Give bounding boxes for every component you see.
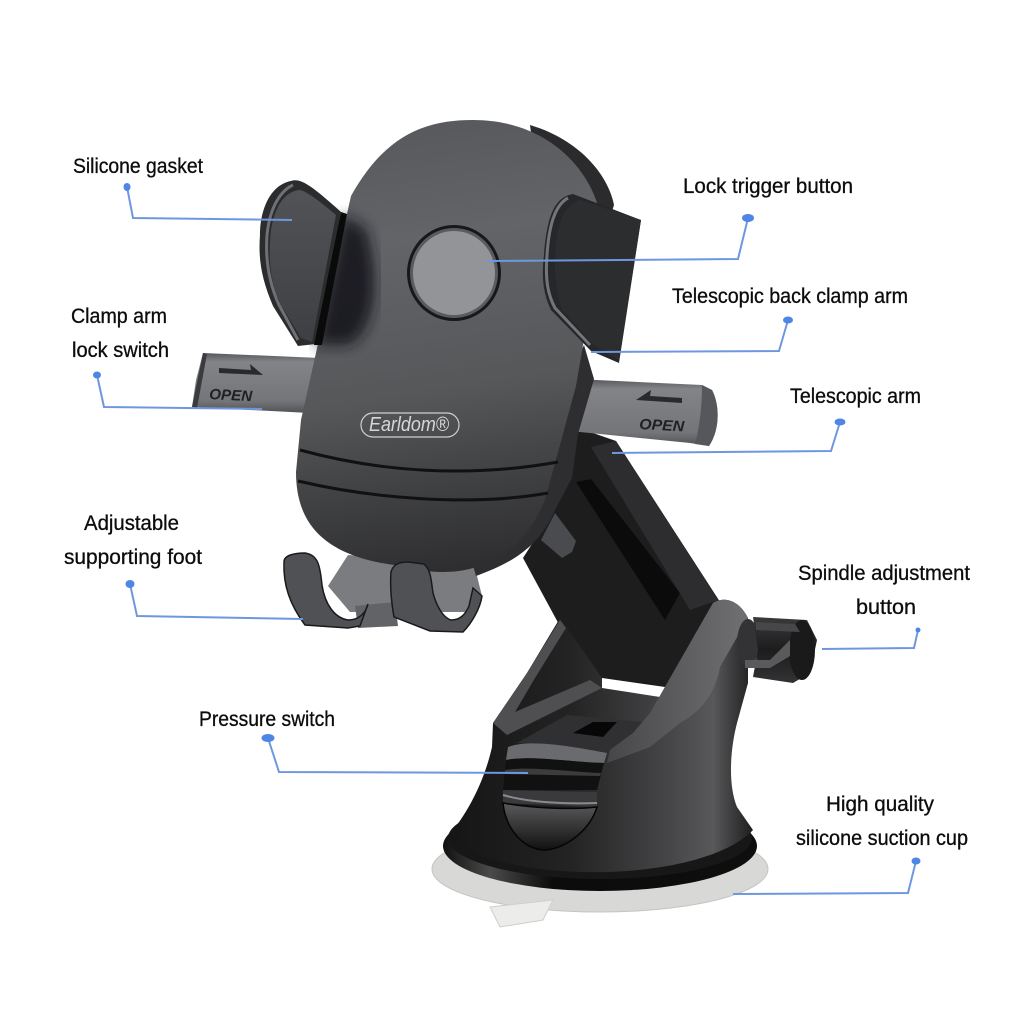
telescopic stalk <box>523 425 722 700</box>
label: Spindle adjustment button <box>798 562 970 649</box>
label text line 2: button <box>856 596 916 619</box>
leader line <box>127 187 292 220</box>
label text: High quality <box>826 793 934 816</box>
right foot <box>391 562 482 632</box>
switch ridge <box>503 790 597 807</box>
base cone <box>447 600 753 872</box>
supporting foot backplate <box>328 555 482 612</box>
label text: Telescopic arm <box>790 385 921 408</box>
label: High quality silicone suction cup <box>733 793 968 894</box>
leader line <box>268 738 528 773</box>
label text: Lock trigger button <box>683 175 853 198</box>
body band lines <box>300 450 558 471</box>
adjustment nut behind holder <box>541 513 576 558</box>
leader line <box>97 375 262 409</box>
label text: Silicone gasket <box>73 155 203 178</box>
left foot <box>284 553 368 628</box>
marker dot <box>124 183 130 191</box>
back shell edge <box>530 125 614 250</box>
label: Clamp arm lock switch <box>71 305 262 409</box>
label text line 2: lock switch <box>72 339 169 362</box>
label: Telescopic back clamp arm <box>591 285 908 352</box>
right OPEN label: OPEN <box>639 416 686 435</box>
label: Adjustable supporting foot <box>64 512 303 619</box>
marker dot <box>93 372 101 378</box>
label text: Clamp arm <box>71 305 167 328</box>
label: Pressure switch <box>199 708 528 773</box>
holder rim <box>470 345 594 576</box>
label: Silicone gasket <box>73 155 292 220</box>
marker dot <box>783 316 793 324</box>
leader line <box>591 320 788 352</box>
marker dot <box>912 858 920 864</box>
left telescopic arm <box>192 353 320 413</box>
right telescopic arm <box>570 379 718 446</box>
marker dot <box>126 580 134 588</box>
switch lip <box>506 743 607 763</box>
marker dot <box>262 734 274 742</box>
label text: Pressure switch <box>199 708 335 731</box>
collar strip <box>607 600 748 763</box>
foot link <box>355 602 398 628</box>
lock trigger button <box>407 225 501 321</box>
suction cup base disc <box>432 797 768 927</box>
label text: Adjustable <box>84 512 179 535</box>
pad shadow <box>315 215 375 345</box>
Earldom logo: Earldom® <box>369 414 449 436</box>
holder main body <box>296 120 602 572</box>
label text: Telescopic back clamp arm <box>672 285 908 308</box>
leader line <box>612 422 840 453</box>
left arrow marker <box>219 364 263 375</box>
left collar strip <box>493 620 602 735</box>
pressure switch <box>503 743 607 850</box>
marker dot <box>834 418 846 426</box>
marker dot <box>742 214 754 222</box>
leader line <box>487 218 748 261</box>
label: Lock trigger button <box>487 175 853 261</box>
label: Telescopic arm <box>612 385 921 453</box>
label text line 2: supporting foot <box>64 546 202 569</box>
left silicone pad <box>260 180 347 346</box>
switch barrel <box>503 758 604 790</box>
left OPEN label: OPEN <box>209 386 254 405</box>
marker dot <box>916 628 920 632</box>
leader line <box>822 630 918 649</box>
leader line <box>130 584 303 619</box>
right arrow marker <box>636 390 682 403</box>
label text: Spindle adjustment <box>798 562 970 585</box>
spindle adjustment knob <box>737 617 817 683</box>
leader line <box>733 861 916 894</box>
switch dome <box>503 803 597 850</box>
label text line 2: silicone suction cup <box>796 827 968 850</box>
product: phone holder illustration <box>192 120 817 927</box>
right silicone pad <box>543 194 641 363</box>
